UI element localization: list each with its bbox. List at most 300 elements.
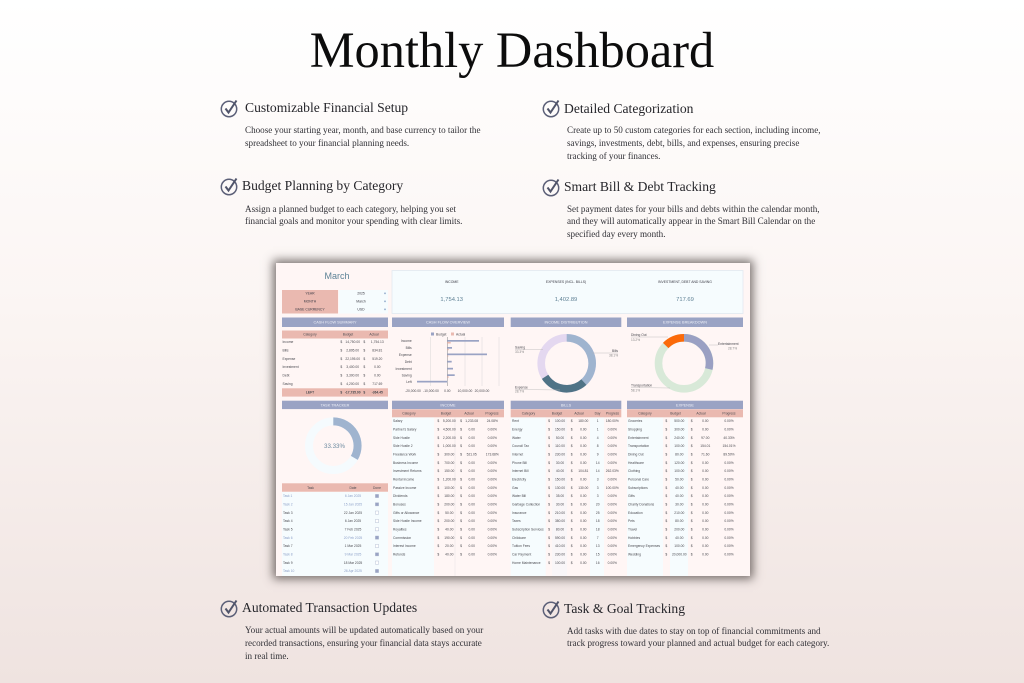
panel: income distribution: 38.1% xyxy=(609,354,618,358)
panel: expense table: 500.00 xyxy=(674,419,685,423)
panel: income table: 0.00% xyxy=(488,544,497,548)
panel: expense table: 0.00% xyxy=(724,536,734,540)
task table: 6 Jan 2025 xyxy=(345,519,361,523)
panel: month selector: MONTH xyxy=(304,300,317,304)
panel: bills table: 0.00 xyxy=(580,511,587,515)
panel: bills table: Rent xyxy=(512,419,519,423)
panel: expense table: $ xyxy=(691,469,693,473)
panel: income table: 0.00% xyxy=(488,469,497,473)
panel: bills table: $ xyxy=(548,478,550,482)
panel: income table: 0.00% xyxy=(488,444,497,448)
panel: income table: $ xyxy=(460,519,462,523)
panel: income table: $ xyxy=(460,528,462,532)
panel: cash flow summary: $ xyxy=(340,365,342,369)
title: Monthly Dashboard xyxy=(310,22,714,78)
panel: expense table: 0.00 xyxy=(702,544,709,548)
panel: expense table: $ xyxy=(691,519,693,523)
panel: income table: Partner's Salary xyxy=(393,428,417,432)
panel: expense table: Subscriptions xyxy=(628,486,648,490)
panel: bills table: Phone Bill xyxy=(512,461,527,465)
panel: cash flow summary xyxy=(282,318,388,397)
panel: bills table: 110.00 xyxy=(555,444,565,448)
panel: income table: $ xyxy=(460,469,462,473)
panel: income table: 0.00% xyxy=(488,486,497,490)
panel: income table: Royalties xyxy=(393,528,407,532)
panel: expense table: 0.00% xyxy=(724,461,734,465)
panel: expense table: Charity Donations xyxy=(628,502,655,506)
panel: cash flow summary: Bills xyxy=(282,348,289,352)
panel: expense table: 100.00 xyxy=(674,444,685,448)
panel: bills table: Category xyxy=(522,412,536,416)
panel: bills table: 35.00 xyxy=(556,494,564,498)
panel: cash flow summary: $ xyxy=(340,357,342,361)
panel: expense table: $ xyxy=(691,428,693,432)
panel: expense table: Transportation xyxy=(628,444,649,448)
panel: expense table: $ xyxy=(691,536,693,540)
panel: expense table: 0.00% xyxy=(724,528,734,532)
panel: income table: 521.05 xyxy=(467,452,477,456)
panel: bills table: $ xyxy=(571,469,573,473)
panel: cash flow summary: $ xyxy=(340,382,342,386)
panel: expense table: 80.00 xyxy=(675,452,684,456)
panel: income table: Business Income xyxy=(393,461,418,465)
text block: spreadsheet to your financial planning needs. xyxy=(245,138,409,148)
panel: cash flow overview chart: Left xyxy=(406,380,412,384)
panel: cash flow summary: Budget xyxy=(343,333,353,337)
panel: bills table: Home Maintenance xyxy=(512,561,541,565)
panel: expense breakdown xyxy=(627,318,743,392)
panel: income table: 100.00 xyxy=(444,486,455,490)
panel: bills table: $ xyxy=(548,552,550,556)
panel: bills table: BILLS xyxy=(561,403,572,407)
panel: income table: 0.00% xyxy=(488,494,497,498)
panel: expense breakdown: 58.1% xyxy=(631,388,640,392)
panel: month selector: 2025 xyxy=(357,292,365,296)
panel: income table: Freelance Work xyxy=(393,452,417,456)
panel: bills table: Electricity xyxy=(512,478,526,482)
panel: income table: 4,500.00 xyxy=(443,428,456,432)
panel: expense table: $ xyxy=(665,444,667,448)
panel: expense table: $ xyxy=(691,461,693,465)
panel: income table: $ xyxy=(437,444,439,448)
panel: bills table: 30.00 xyxy=(556,502,564,506)
task table: 9 Mar 2025 xyxy=(345,552,362,556)
panel: expense table: $ xyxy=(691,486,693,490)
panel: income table: $ xyxy=(460,502,462,506)
panel: income table: $ xyxy=(460,436,462,440)
panel: bills table: Water Bill xyxy=(512,494,526,498)
text block: Add tasks with due dates to stay on top of financial commitments and xyxy=(567,626,821,636)
panel: cash flow summary: -364.45 xyxy=(372,391,383,395)
panel: bills table: 100.00 xyxy=(555,419,565,423)
panel: bills table: Insurance xyxy=(512,511,527,515)
panel: cash flow overview chart: Bills xyxy=(406,346,412,350)
panel: expense table: Wedding xyxy=(628,552,641,556)
task table: Date xyxy=(350,486,357,490)
panel: bills table: 130.00 xyxy=(578,486,589,490)
panel: bills table: 40.00 xyxy=(556,469,564,473)
panel: bills table: 9 xyxy=(597,452,599,456)
panel: cash flow summary: 717.69 xyxy=(372,382,383,386)
panel: expense table: 0.00% xyxy=(724,494,734,498)
text block: track progress toward your planned and actual budget for each category. xyxy=(567,638,829,648)
heading: Customizable Financial Setup xyxy=(245,100,408,115)
panel: income table: $ xyxy=(460,511,462,515)
panel: expense table: 40.33% xyxy=(723,436,735,440)
panel: bills table: $ xyxy=(571,519,573,523)
panel: expense table: 100.00 xyxy=(674,469,685,473)
panel: expense table: 0.00% xyxy=(724,552,734,556)
panel: bills table: 15 xyxy=(596,552,600,556)
panel: income table: 0.00 xyxy=(468,436,475,440)
panel: income table: Actual xyxy=(464,412,474,416)
panel: bills table: Childcare xyxy=(512,536,526,540)
heading: Budget Planning by Category xyxy=(242,178,403,193)
panel: bills table: $ xyxy=(548,561,550,565)
panel: bills table: 0.00% xyxy=(608,452,617,456)
panel: expense table: $ xyxy=(665,469,667,473)
panel: cash flow summary: 519.20 xyxy=(372,357,383,361)
task table: 1 Mar 2025 xyxy=(345,544,362,548)
panel: expense table: 240.00 xyxy=(674,436,685,440)
panel: income table: 0.00 xyxy=(468,528,475,532)
panel: income table: 0.00 xyxy=(468,486,475,490)
panel: expense table: 0.00% xyxy=(724,511,734,515)
panel: income table: $ xyxy=(460,544,462,548)
panel: expense table: $ xyxy=(665,494,667,498)
panel: bills table: $ xyxy=(548,528,550,532)
panel: income table: 0.00% xyxy=(488,536,497,540)
panel: bills table: $ xyxy=(548,486,550,490)
panel: income table: 0.00 xyxy=(468,478,475,482)
panel: income table: Side Hustle xyxy=(393,436,410,440)
panel: expense table: 0.00 xyxy=(702,536,709,540)
panel: expense table: 0.00 xyxy=(702,419,709,423)
panel: income table: Passive Income xyxy=(393,486,416,490)
panel: expense table: $ xyxy=(665,552,667,556)
panel: expense table: 210.00 xyxy=(674,511,685,515)
panel: bills table: 0.00 xyxy=(580,461,587,465)
panel: expense table: 0.00% xyxy=(724,544,734,548)
panel: bills table: $ xyxy=(571,511,573,515)
panel: income table: Gifts or Allowance xyxy=(393,511,420,515)
panel: cash flow overview chart: Expense xyxy=(399,353,412,357)
panel: expense table: 0.00% xyxy=(724,502,734,506)
panel: income table: Side Hustle Income xyxy=(393,519,422,523)
panel: bills table: 3 xyxy=(597,494,599,498)
donut chart xyxy=(658,338,710,389)
panel: expense table: 0.00% xyxy=(724,428,734,432)
panel: bills table: 410.00 xyxy=(555,544,565,548)
panel: expense table: 20,000.00 xyxy=(672,552,687,556)
panel: cash flow summary: Category xyxy=(303,333,317,337)
panel: income distribution: Saving xyxy=(515,346,525,350)
icon: check circle xyxy=(220,178,238,196)
panel: bills table: $ xyxy=(571,552,573,556)
progress donut: 33.33% xyxy=(324,443,345,450)
panel: income distribution: 28.7% xyxy=(515,390,524,394)
panel: bills table: 30.00 xyxy=(556,461,564,465)
panel: bills table: 0.00 xyxy=(580,561,587,565)
feature: Customizable Financial Setup xyxy=(220,100,481,148)
panel: bills table: 180.00% xyxy=(606,419,619,423)
panel: bills table: 104.81 xyxy=(578,469,589,473)
panel: bills table: 0.00 xyxy=(580,528,587,532)
panel: bills table: 0.00% xyxy=(608,444,617,448)
panel: bills table: 0.00% xyxy=(608,544,617,548)
panel: bills table: Budget xyxy=(552,412,562,416)
panel: expense table: $ xyxy=(665,461,667,465)
panel: income table: 0.00% xyxy=(488,428,497,432)
icon: check circle xyxy=(542,601,560,618)
panel: bills table: $ xyxy=(548,469,550,473)
panel: income table: Category xyxy=(402,412,416,416)
panel: income table: 150.00 xyxy=(444,469,455,473)
panel: bills table: 100.00% xyxy=(606,486,619,490)
panel: bills table: 8 xyxy=(597,444,599,448)
panel: income table: $ xyxy=(437,469,439,473)
panel: bills table: 0.00 xyxy=(580,436,587,440)
panel: expense table: EXPENSE xyxy=(676,403,694,407)
panel: bills table: 0.00 xyxy=(580,536,587,540)
panel: income table: Side Hustle 2 xyxy=(393,444,413,448)
panel: income table: 40.00 xyxy=(445,528,454,532)
panel: income table: 0.00% xyxy=(488,552,497,556)
panel: expense table: $ xyxy=(665,486,667,490)
panel: bills table: 0.00 xyxy=(580,502,587,506)
KPI: expenses xyxy=(546,280,586,303)
panel: bills table: 0.00% xyxy=(608,478,617,482)
panel: income table: Investment Returns xyxy=(393,469,422,473)
panel: cash flow summary: Investment xyxy=(282,365,299,369)
panel: income table: 0.00 xyxy=(468,519,475,523)
panel: income table: 0.00% xyxy=(488,478,497,482)
panel: bills table: $ xyxy=(571,436,573,440)
task table: 15 Jan 2025 xyxy=(344,502,362,506)
panel: expense table: $ xyxy=(691,552,693,556)
panel: bills table: Taxes xyxy=(512,519,521,523)
panel: bills table: $ xyxy=(571,494,573,498)
panel: bills table: $ xyxy=(571,444,573,448)
feature: Task & Goal Tracking xyxy=(542,601,829,648)
panel: bills table: 262.03% xyxy=(606,469,619,473)
panel: expense table: 40.00 xyxy=(675,486,684,490)
panel: cash flow summary: $ xyxy=(340,391,342,395)
panel: cash flow overview chart: Debt xyxy=(405,360,412,364)
panel: income table: 0.00% xyxy=(488,528,497,532)
panel: income table: Salary xyxy=(393,419,403,423)
panel: bills table: Progress xyxy=(606,412,619,416)
panel: expense table: 154.01% xyxy=(722,444,736,448)
panel: expense table: Shopping xyxy=(628,428,642,432)
panel: income distribution: INCOME DISTRIBUTION xyxy=(544,321,588,325)
text block: and they will automatically appear in the Smart Bill Calendar on the xyxy=(567,216,815,226)
panel: income table: 0.00 xyxy=(468,552,475,556)
panel: cash flow summary: $ xyxy=(363,357,365,361)
panel: cash flow summary: $ xyxy=(363,365,365,369)
icon: check circle xyxy=(542,100,560,118)
panel: expense table: 80.00 xyxy=(675,519,684,523)
panel: expense table: Education xyxy=(628,511,643,515)
panel: bills table: 0.00% xyxy=(608,552,617,556)
panel: expense table: $ xyxy=(691,478,693,482)
panel: bills table: 14 xyxy=(596,469,600,473)
panel: expense table: 0.00% xyxy=(724,419,734,423)
task table: Task 10 xyxy=(283,569,295,573)
panel: expense table: 0.00 xyxy=(702,511,709,515)
panel: cash flow summary: Saving xyxy=(282,382,293,386)
panel: cash flow summary: CASH FLOW SUMMARY xyxy=(314,321,357,325)
panel: cash flow summary: 14,750.00 xyxy=(345,340,360,344)
panel: bills table: Energy xyxy=(512,428,523,432)
panel: income table: $ xyxy=(437,536,439,540)
panel: cash flow summary: LEFT xyxy=(306,391,314,395)
panel: expense table: $ xyxy=(691,444,693,448)
panel: expense table: $ xyxy=(665,519,667,523)
panel: bills table: 4 xyxy=(597,436,599,440)
panel: cash flow summary: $ xyxy=(340,348,342,352)
icon: check circle xyxy=(542,179,560,196)
panel: month selector: ▾ xyxy=(384,300,386,304)
panel: expense table: $ xyxy=(691,528,693,532)
panel: bills table: 150.00 xyxy=(555,478,565,482)
panel: income distribution xyxy=(511,318,621,394)
text block: Choose your starting year, month, and base currency to tailor the xyxy=(245,125,481,135)
panel: income table: 0.00 xyxy=(468,544,475,548)
panel: expense table: $ xyxy=(691,511,693,515)
task table: Task 3 xyxy=(283,511,293,515)
panel: bills table: 0.00 xyxy=(580,552,587,556)
panel: expense table: Dining Out xyxy=(628,452,644,456)
panel: bills table: 0.00% xyxy=(608,428,617,432)
KPI: expenses: 1,402.89 xyxy=(555,297,577,303)
panel: bills table: 180.00 xyxy=(578,419,589,423)
panel: cash flow summary: $ xyxy=(363,348,365,352)
panel: bills table: 0.00 xyxy=(580,452,587,456)
panel: expense table: $ xyxy=(665,478,667,482)
panel: bills table: $ xyxy=(571,452,573,456)
panel: expense table: Hobbies xyxy=(628,536,640,540)
panel: bills table: 14 xyxy=(596,461,600,465)
panel: expense table: 0.00 xyxy=(702,478,709,482)
panel: income table: 0.00% xyxy=(488,502,497,506)
panel: income table: $ xyxy=(460,552,462,556)
legend: Budget xyxy=(436,332,447,336)
panel: expense table: 71.60 xyxy=(701,452,710,456)
panel: bills table: Gas xyxy=(512,486,518,490)
panel: bills table: 18 xyxy=(596,519,600,523)
panel: income table: $ xyxy=(437,544,439,548)
panel: bills table: $ xyxy=(548,519,550,523)
panel: cash flow summary: 3,400.00 xyxy=(346,365,359,369)
panel: income table: 0.00 xyxy=(468,469,475,473)
panel: income table: 0.00% xyxy=(488,511,497,515)
panel: expense table: Budget xyxy=(670,412,681,416)
panel: expense table: 89.50% xyxy=(723,452,735,456)
panel: cash flow summary: $ xyxy=(363,340,365,344)
text block: Set payment dates for your bills and debts within the calendar month, xyxy=(567,204,820,214)
panel: expense table: 0.00 xyxy=(702,528,709,532)
panel: income table: $ xyxy=(437,452,439,456)
panel: bills table: $ xyxy=(548,436,550,440)
panel: income table: 0.00% xyxy=(488,461,497,465)
KPI: investment, debt and saving xyxy=(658,280,712,303)
panel: bills table: 0.00% xyxy=(608,561,617,565)
panel: bills table: 0.00% xyxy=(608,436,617,440)
panel: expense table: 0.00% xyxy=(724,478,734,482)
panel: income table: Budget xyxy=(441,412,451,416)
panel: cash flow overview chart xyxy=(392,318,504,393)
panel: expense table: $ xyxy=(665,436,667,440)
panel: income table: 0.00% xyxy=(488,519,497,523)
panel: expense table: $ xyxy=(665,502,667,506)
panel: cash flow summary: 2,895.00 xyxy=(346,348,359,352)
panel: bills table: Water xyxy=(512,436,522,440)
panel: bills table: 210.00 xyxy=(555,511,565,515)
donut chart xyxy=(541,338,592,389)
text block xyxy=(567,204,820,239)
panel: expense breakdown: Entertainment xyxy=(718,342,739,346)
panel: expense table: 0.00 xyxy=(702,552,709,556)
task table: 6 Jan 2025 xyxy=(345,494,361,498)
panel: income table: $ xyxy=(437,419,439,423)
panel: bills table: Tuition Fees xyxy=(512,544,530,548)
panel: income table: 300.00 xyxy=(444,452,455,456)
panel: bills table: 590.00 xyxy=(555,536,565,540)
panel: income table: INCOME xyxy=(440,403,456,407)
panel: bills table: $ xyxy=(571,461,573,465)
panel: expense table: 0.00% xyxy=(724,486,734,490)
panel: income table: $ xyxy=(437,511,439,515)
panel: bills table: 0.00% xyxy=(608,536,617,540)
panel: income table: $ xyxy=(437,494,439,498)
heading: March: March xyxy=(324,271,350,281)
heading: Task & Goal Tracking xyxy=(564,601,685,616)
panel: bills table: $ xyxy=(548,511,550,515)
panel: bills table: 0.00 xyxy=(580,428,587,432)
text block xyxy=(567,626,829,648)
panel: expense breakdown: 13.2% xyxy=(631,338,640,342)
panel: bills table: $ xyxy=(548,419,550,423)
panel: expense table: Pets xyxy=(628,519,635,523)
KPI: investment, debt and saving: INVESTMENT, DEBT AND SAVING xyxy=(658,280,712,284)
panel: cash flow summary: 4,200.00 xyxy=(346,382,359,386)
panel: cash flow overview chart: Income xyxy=(401,339,412,343)
heading: Automated Transaction Updates xyxy=(242,600,417,615)
panel: expense breakdown: EXPENSE BREAKDOWN xyxy=(663,321,707,325)
panel: expense table: 154.01 xyxy=(700,444,711,448)
panel: bills table: 80.00 xyxy=(556,528,564,532)
panel: bills table: 130.00 xyxy=(555,486,565,490)
panel: month selector: ▾ xyxy=(384,308,386,312)
panel: bills table: 1 xyxy=(597,419,599,423)
panel: expense table: 97.00 xyxy=(701,436,710,440)
progress donut xyxy=(309,421,358,470)
text block: in real time. xyxy=(245,651,289,661)
text block: recorded transactions, ensuring your financial data stays accurate xyxy=(245,638,482,648)
panel: income table: Commission xyxy=(393,536,411,540)
panel: bills table: 1 xyxy=(597,428,599,432)
KPI: income xyxy=(440,280,463,303)
panel: income table: 190.00 xyxy=(444,536,455,540)
panel: cash flow summary: 3,300.00 xyxy=(346,374,359,378)
panel: expense table: $ xyxy=(691,419,693,423)
panel: bills table xyxy=(511,401,621,576)
panel: expense table: 0.00 xyxy=(702,461,709,465)
panel: income table xyxy=(392,401,504,576)
panel: bills table: 100.00 xyxy=(555,561,565,565)
text block: Assign a planned budget to each category, helping you set xyxy=(245,204,456,214)
